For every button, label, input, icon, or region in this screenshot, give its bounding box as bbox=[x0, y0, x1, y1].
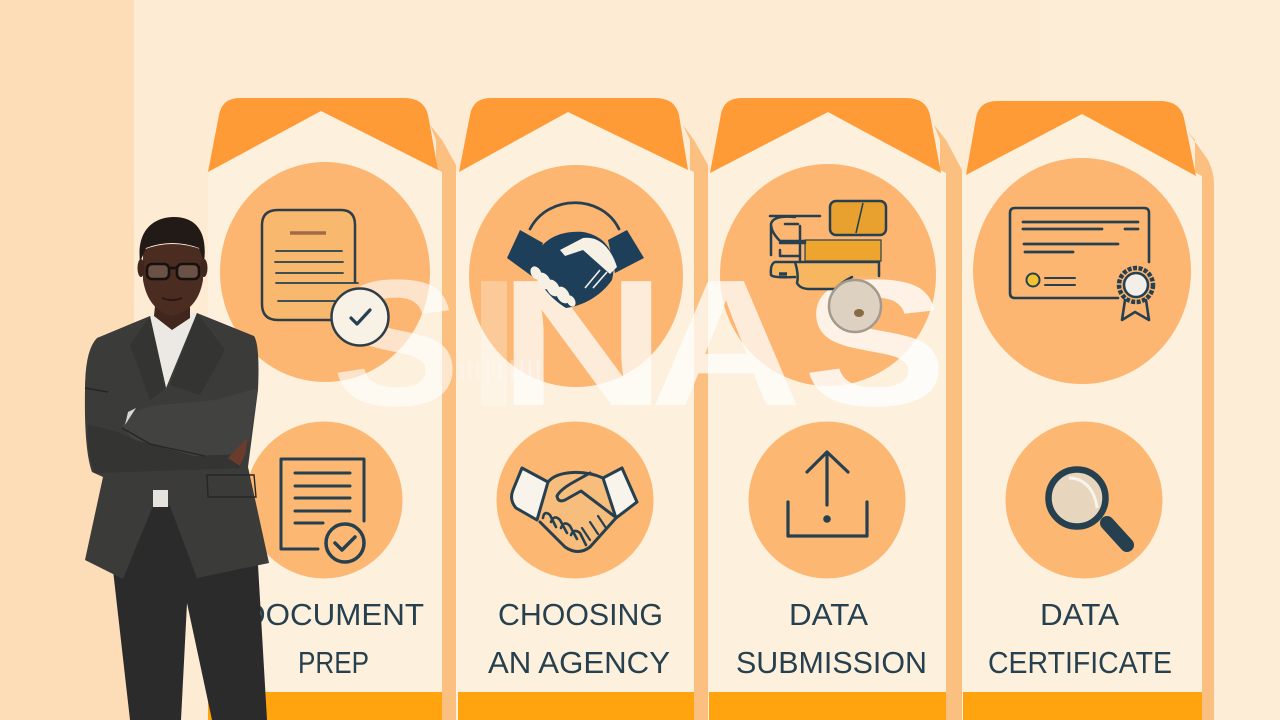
panel: data submission bbox=[708, 98, 962, 720]
icon: document with check bbox=[262, 210, 388, 346]
label: document prep: DOCUMENT bbox=[243, 597, 424, 632]
label: data certificate: DATA bbox=[1040, 597, 1119, 632]
footer bar: data certificate bbox=[963, 692, 1202, 720]
label: document prep bbox=[243, 597, 424, 680]
large circle: document prep bbox=[220, 162, 430, 382]
icon: outline handshake bbox=[512, 468, 637, 552]
watermark: SINAS bbox=[332, 243, 947, 444]
small circle: data submission bbox=[748, 422, 906, 578]
jacket bbox=[85, 313, 269, 579]
label: data certificate: CERTIFICATE bbox=[988, 645, 1172, 680]
label: choosing an agency: CHOOSING bbox=[498, 597, 663, 632]
icon: certificate with rosette bbox=[1010, 208, 1153, 320]
lapels bbox=[130, 313, 225, 400]
icon: books and tablet bbox=[770, 201, 886, 332]
watermark: SINAS: I bbox=[469, 243, 519, 444]
large circle: data submission bbox=[720, 164, 936, 386]
footer bar: choosing an agency bbox=[458, 692, 694, 720]
icon: solid handshake bbox=[507, 203, 644, 308]
watermark: SINAS: S bbox=[803, 243, 947, 444]
orange tab: document prep bbox=[208, 98, 438, 172]
label: data submission: DATA bbox=[789, 597, 868, 632]
small circle: data certificate bbox=[1006, 422, 1162, 578]
label: data certificate bbox=[988, 597, 1172, 680]
label: data submission: SUBMISSION bbox=[736, 645, 927, 680]
shirt bbox=[150, 313, 197, 392]
icon: upload bbox=[788, 452, 867, 536]
watermark: SINAS: A bbox=[650, 243, 802, 444]
large circle: choosing an agency bbox=[469, 165, 683, 387]
label: choosing an agency bbox=[488, 597, 670, 680]
large circle: data certificate bbox=[973, 158, 1191, 384]
icon: magnifier bbox=[1048, 470, 1127, 545]
footer bar: data submission bbox=[709, 692, 946, 720]
person: man in dark suit with crossed arms bbox=[85, 217, 269, 720]
orange tab: data submission bbox=[710, 98, 941, 173]
crossed arms bbox=[88, 425, 245, 473]
footer bar: document prep bbox=[208, 692, 442, 720]
label: data submission bbox=[736, 597, 927, 680]
orange tab: data certificate bbox=[966, 101, 1196, 176]
trousers bbox=[113, 500, 267, 720]
panel: data certificate bbox=[962, 101, 1214, 720]
icon: checklist bbox=[281, 459, 364, 562]
neck and head bbox=[154, 296, 190, 330]
panel: document prep bbox=[208, 98, 456, 720]
glasses bbox=[147, 264, 199, 279]
small circle: choosing an agency bbox=[496, 422, 654, 578]
label: choosing an agency: AN AGENCY bbox=[488, 645, 670, 680]
orange tab: choosing an agency bbox=[459, 98, 688, 172]
panel: choosing an agency bbox=[456, 98, 708, 720]
small circle: document prep bbox=[246, 422, 402, 578]
watermark: SINAS: S bbox=[332, 243, 460, 444]
watermark: SINAS: N bbox=[498, 243, 667, 444]
label: document prep: PREP bbox=[298, 645, 369, 680]
